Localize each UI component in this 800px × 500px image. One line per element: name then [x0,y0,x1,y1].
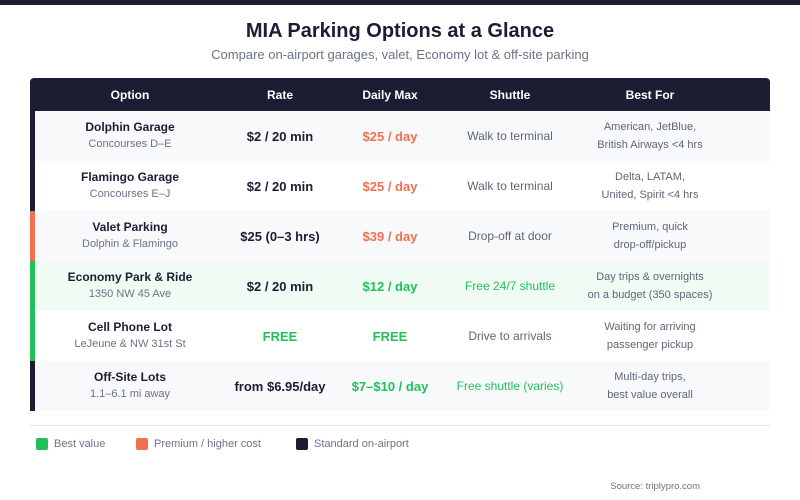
row: Flamingo Garage [30,161,770,211]
row: Dolphin Garage: $2 / 20 min [247,128,313,144]
table header: Shuttle [490,88,530,102]
row: Dolphin Garage: British Airways <4 hrs [597,139,703,151]
row: Flamingo Garage: Delta, LATAM, [615,171,685,183]
row: Off-Site Lots: 1.1–6.1 mi away [90,388,170,400]
legend: Standard on-airport [314,438,409,450]
title: MIA Parking Options at a Glance [246,20,554,42]
row: Valet Parking: $25 (0–3 hrs) [240,228,320,244]
row: Dolphin Garage: American, JetBlue, [604,121,696,133]
table header: Option [111,88,149,102]
row: Flamingo Garage: $2 / 20 min [247,178,313,194]
table header: Best For [626,88,674,102]
row: Economy Park & Ride: $12 / day [363,278,417,294]
row: Flamingo Garage: United, Spirit <4 hrs [602,189,698,201]
row: Valet Parking: Dolphin & Flamingo [82,238,178,250]
row: Valet Parking: drop-off/pickup [614,239,686,251]
row: Economy Park & Ride: Economy Park & Ride [68,270,192,284]
row: Off-Site Lots: Off-Site Lots [94,370,166,384]
row: Dolphin Garage: Dolphin Garage [85,120,175,134]
row: Off-Site Lots: best value overall [607,389,693,401]
row: Economy Park & Ride [30,261,770,311]
row: Cell Phone Lot: FREE [373,328,407,344]
row: Cell Phone Lot: passenger pickup [607,339,693,351]
table header: Daily Max [362,88,418,102]
row: Valet Parking: Valet Parking [92,220,168,234]
row: Dolphin Garage: Walk to terminal [467,129,553,143]
row: Off-Site Lots: from $6.95/day [234,378,326,394]
row: Flamingo Garage: Flamingo Garage [81,170,179,184]
row: Economy Park & Ride: $2 / 20 min [247,278,313,294]
row: Off-Site Lots: Free shuttle (varies) [457,379,563,393]
row: Valet Parking: Premium, quick [612,221,688,233]
row: Dolphin Garage [30,111,770,161]
row: Economy Park & Ride: Free 24/7 shuttle [465,279,555,293]
row: Cell Phone Lot: Waiting for arriving [604,321,696,333]
top bar [0,0,800,5]
legend: Premium / higher cost [154,438,261,450]
row: Valet Parking: Drop-off at door [468,229,552,243]
row: Valet Parking [30,211,770,261]
row: Cell Phone Lot: Drive to arrivals [468,329,552,343]
row: Cell Phone Lot: Cell Phone Lot [88,320,172,334]
row: Off-Site Lots [30,361,770,411]
row: Cell Phone Lot: LeJeune & NW 31st St [74,338,186,350]
row: Off-Site Lots: Multi-day trips, [614,371,686,383]
legend [36,438,409,450]
row: Economy Park & Ride: Day trips & overnights [596,271,704,283]
subtitle: Compare on-airport garages, valet, Economy lot & off-site parking [211,47,589,62]
row: Flamingo Garage: Concourses E–J [90,188,170,200]
row: Cell Phone Lot: FREE [263,328,297,344]
row: Cell Phone Lot [30,311,770,361]
table header: Rate [267,88,293,102]
row: Economy Park & Ride: 1350 NW 45 Ave [89,288,171,300]
source: Source: triplypro.com [610,481,700,492]
row: Economy Park & Ride: on a budget (350 spaces) [588,289,712,301]
table [30,78,770,411]
row: Valet Parking: $39 / day [363,228,417,244]
row: Off-Site Lots: $7–$10 / day [352,378,428,394]
legend: Best value [54,438,105,450]
row: Dolphin Garage: Concourses D–E [88,138,172,150]
row: Dolphin Garage: $25 / day [363,128,417,144]
row: Flamingo Garage: Walk to terminal [467,179,553,193]
row: Flamingo Garage: $25 / day [363,178,417,194]
table header [30,78,770,111]
